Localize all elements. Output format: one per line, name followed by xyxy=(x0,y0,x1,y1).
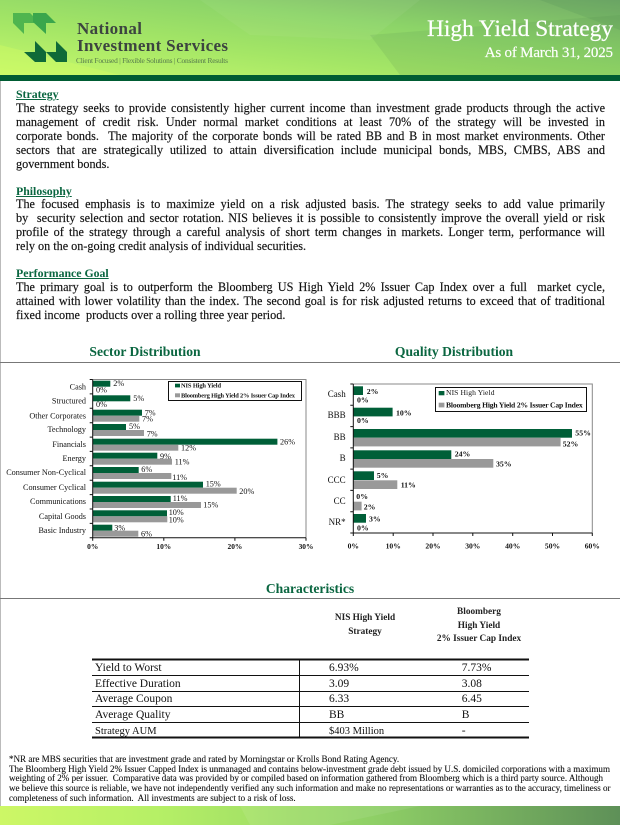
table rows: BB xyxy=(329,709,345,721)
footnote: completeness of such information. All investments are subject to a risk of loss. xyxy=(9,793,296,803)
table rows: - xyxy=(462,725,466,737)
bar chart: sector distribution: Structured xyxy=(52,396,86,406)
text: performance goal: The primary goal is to outperform the Bloomberg US High Yield 2% Issuer Cap Index over a full market cycle, xyxy=(16,280,605,294)
bar chart: quality distribution: 40% xyxy=(505,542,520,550)
table rows: 3.08 xyxy=(462,678,482,690)
bar chart: sector distribution: 2% xyxy=(113,379,124,388)
heading: philosophy: Philosophy xyxy=(16,184,72,198)
table rows: 6.45 xyxy=(462,693,482,705)
heading: characteristics: Characteristics xyxy=(266,581,354,596)
column headers: Bloomberg xyxy=(457,607,501,617)
logo xyxy=(13,13,228,65)
report title: As of March 31, 2025 xyxy=(485,45,613,61)
text: strategy: government bonds. xyxy=(16,157,109,171)
bar chart: sector distribution: 11% xyxy=(173,494,188,503)
table rows: Yield to Worst xyxy=(95,662,162,674)
bar chart: sector distribution: Consumer Non-Cyclical xyxy=(6,468,87,477)
footnote: weighting of 2% per issuer. Comparative data was provided by or compiled based on information gathered from Bloomberg which is a third party source. Although xyxy=(9,773,603,783)
text: philosophy: by security selection and sector rotation. NIS believes it is possible to consistently improve the overall yield or risk xyxy=(16,211,605,225)
bar chart: sector distribution: 10% xyxy=(169,508,184,517)
bar chart: quality distribution: 50% xyxy=(545,542,560,550)
text: performance goal: fixed income products over a rolling three year period. xyxy=(16,308,285,322)
table rows: 6.93% xyxy=(329,662,359,674)
footnote: The Bloomberg High Yield 2% Issuer Capped Index is unmanaged and contains below-investment grade debt issued by U.S. domiciled corporations with a maximum xyxy=(9,764,610,774)
bar chart: sector distribution: 6% xyxy=(141,530,152,538)
bar chart: sector distribution: Consumer Cyclical xyxy=(23,483,87,492)
bar chart: sector distribution: 7% xyxy=(147,430,158,438)
bar chart: sector distribution: 12% xyxy=(181,444,196,452)
bar chart: sector distribution: 15% xyxy=(206,480,221,488)
footnote xyxy=(8,754,611,803)
bar chart: quality distribution: 3% xyxy=(369,514,381,524)
bar chart: sector distribution: Basic Industry xyxy=(38,526,87,535)
bar chart: quality distribution: NR* xyxy=(329,517,346,527)
legend: quality xyxy=(436,388,586,412)
bar chart: sector distribution: 10% xyxy=(169,516,184,524)
bar chart: quality distribution: BBB xyxy=(328,410,346,420)
bar chart: quality distribution: 55% xyxy=(575,428,591,438)
report title xyxy=(427,16,613,61)
text: strategy: management of credit risk. Under normal market conditions at least 70% of the strategy will be invested in xyxy=(16,115,605,129)
bar chart: sector distribution: 11% xyxy=(172,473,187,482)
table rows: $403 Million xyxy=(329,726,385,737)
legend: sector: NIS High Yield xyxy=(181,383,221,390)
column headers: NIS High Yield xyxy=(335,613,396,623)
bar chart: sector distribution: 7% xyxy=(142,414,153,424)
bar chart: quality distribution: BB xyxy=(334,432,346,442)
bar chart: quality distribution: 0% xyxy=(348,542,359,550)
bar chart: sector distribution xyxy=(6,379,600,551)
bar chart: quality distribution: 10% xyxy=(386,542,401,550)
page edge xyxy=(0,81,1,806)
heading: strategy: Strategy xyxy=(16,87,59,101)
column headers: Strategy xyxy=(348,627,382,637)
bar chart: quality distribution: 0% xyxy=(357,524,369,532)
column headers xyxy=(335,607,521,644)
bar chart: quality distribution: 5% xyxy=(377,471,389,480)
bar chart: sector distribution: 7% xyxy=(145,408,156,418)
text: philosophy xyxy=(16,197,606,253)
bar chart: sector distribution: 3% xyxy=(114,524,125,532)
bar chart: quality distribution: 0% xyxy=(357,396,369,404)
bar chart: quality distribution: CC xyxy=(334,496,346,506)
bar chart: sector distribution: Other Corporates xyxy=(29,412,86,420)
bar chart: quality distribution: 35% xyxy=(496,460,512,468)
table rows: 3.09 xyxy=(329,678,349,690)
column headers: 2% Issuer Cap Index xyxy=(437,634,521,644)
text: strategy: corporate bonds. The majority of the corporate bonds will be rated BB and B in most market environments. Other xyxy=(16,129,605,143)
bar chart: sector distribution: Communications xyxy=(30,497,86,506)
footnote: *NR are MBS securities that are investment grade and rated by Morningstar or Krolls Bond Rating Agency. xyxy=(9,754,399,764)
text: philosophy: profile of the strategy through a careful analysis of short term changes in markets. Longer term, performance will xyxy=(16,225,605,239)
header banner xyxy=(0,0,620,81)
table rows: B xyxy=(462,709,470,721)
table rows: 7.73% xyxy=(462,662,492,674)
footer band xyxy=(0,806,620,825)
bar chart: quality distribution: 30% xyxy=(465,542,480,550)
table rows: Average Coupon xyxy=(95,693,173,705)
legend: sector: Bloomberg High Yield 2% Issuer Cap Index xyxy=(181,392,296,399)
bar chart: sector distribution: 0% xyxy=(87,542,98,551)
table: characteristics xyxy=(92,607,529,738)
bar chart: quality distribution: 52% xyxy=(563,440,578,448)
bar chart: quality distribution: CCC xyxy=(328,475,346,485)
bar chart: quality distribution: 24% xyxy=(455,450,470,458)
table rows xyxy=(95,662,492,737)
bar chart: quality distribution: 0% xyxy=(357,416,369,425)
bar chart: sector distribution: 11% xyxy=(175,458,190,466)
column headers: High Yield xyxy=(458,621,501,631)
bar chart: quality distribution: 2% xyxy=(364,502,376,512)
table rows: Strategy AUM xyxy=(95,726,157,737)
bar chart: quality distribution: 20% xyxy=(425,542,441,550)
bar chart: sector distribution: 30% xyxy=(299,542,313,551)
heading: quality distribution: Quality Distribution xyxy=(395,344,513,359)
text: strategy: sectors that are strategically utilized to attain diversification include municipal bonds, MBS, CMBS, ABS and xyxy=(16,143,605,157)
logo: Client Focused | Flexible Solutions | Consistent Results xyxy=(76,56,228,65)
bar chart: sector distribution: Financials xyxy=(52,440,86,449)
bar chart: sector distribution: Technology xyxy=(47,425,87,434)
text: philosophy: rely on the on-going credit analysis of individual securities. xyxy=(16,239,306,253)
bar chart: sector distribution: Energy xyxy=(62,454,87,463)
bar chart: sector distribution: 5% xyxy=(133,394,144,403)
bar chart: sector distribution: 20% xyxy=(228,542,242,551)
bar chart: quality distribution: 10% xyxy=(396,408,412,418)
report title: High Yield Strategy xyxy=(427,16,613,42)
footnote: we believe this source is reliable, we have not independently verified any such information and make no representations or warranties as to the accuracy, timeliness or xyxy=(9,783,611,793)
legend: quality: Bloomberg High Yield 2% Issuer Cap Index xyxy=(446,400,583,410)
text: performance goal: attained with lower volatility than the index. The second goal is for risk adjusted returns to exceed that of traditional xyxy=(16,294,605,308)
bar chart: sector distribution: 26% xyxy=(280,438,295,446)
table rows: 6.33 xyxy=(329,693,349,705)
bar chart: quality distribution: 11% xyxy=(401,480,416,490)
table rows: Average Quality xyxy=(95,709,171,721)
bar chart: sector distribution: 0% xyxy=(96,386,107,394)
legend: sector xyxy=(168,382,302,400)
text: strategy: The strategy seeks to provide consistently higher current income than investment grade products through the active xyxy=(16,101,605,115)
bar chart: sector distribution: 5% xyxy=(129,422,140,431)
bar chart: sector distribution: Cash xyxy=(70,382,86,392)
bar chart: sector distribution: 6% xyxy=(141,465,152,474)
bar chart: sector distribution: 9% xyxy=(160,452,171,461)
bar chart: quality distribution: 60% xyxy=(585,542,600,550)
bar chart: sector distribution: Capital Goods xyxy=(39,512,86,521)
bar chart: quality distribution: B xyxy=(340,453,346,463)
table rows: Effective Duration xyxy=(95,678,181,690)
logo: Investment Services xyxy=(77,36,228,55)
bar chart: sector distribution: 15% xyxy=(203,500,218,510)
bar chart: quality distribution: Cash xyxy=(328,389,346,399)
heading: performance goal: Performance Goal xyxy=(16,266,109,280)
bar chart: quality distribution: 2% xyxy=(367,387,379,396)
bar chart: sector distribution: 20% xyxy=(239,487,254,496)
bar chart: quality distribution xyxy=(328,384,600,550)
text: performance goal xyxy=(16,280,605,322)
text: strategy xyxy=(16,101,605,171)
text: philosophy: The focused emphasis is to maximize yield on a risk adjusted basis. The strategy seeks to add value primarily xyxy=(16,197,605,211)
logo: National xyxy=(77,19,142,38)
legend: quality: NIS High Yield xyxy=(446,388,495,397)
heading: sector distribution: Sector Distribution xyxy=(89,344,201,359)
bar chart: sector distribution: 0% xyxy=(96,400,107,409)
bar chart: quality distribution: 0% xyxy=(356,492,368,501)
bar chart: sector distribution: 10% xyxy=(156,542,171,551)
